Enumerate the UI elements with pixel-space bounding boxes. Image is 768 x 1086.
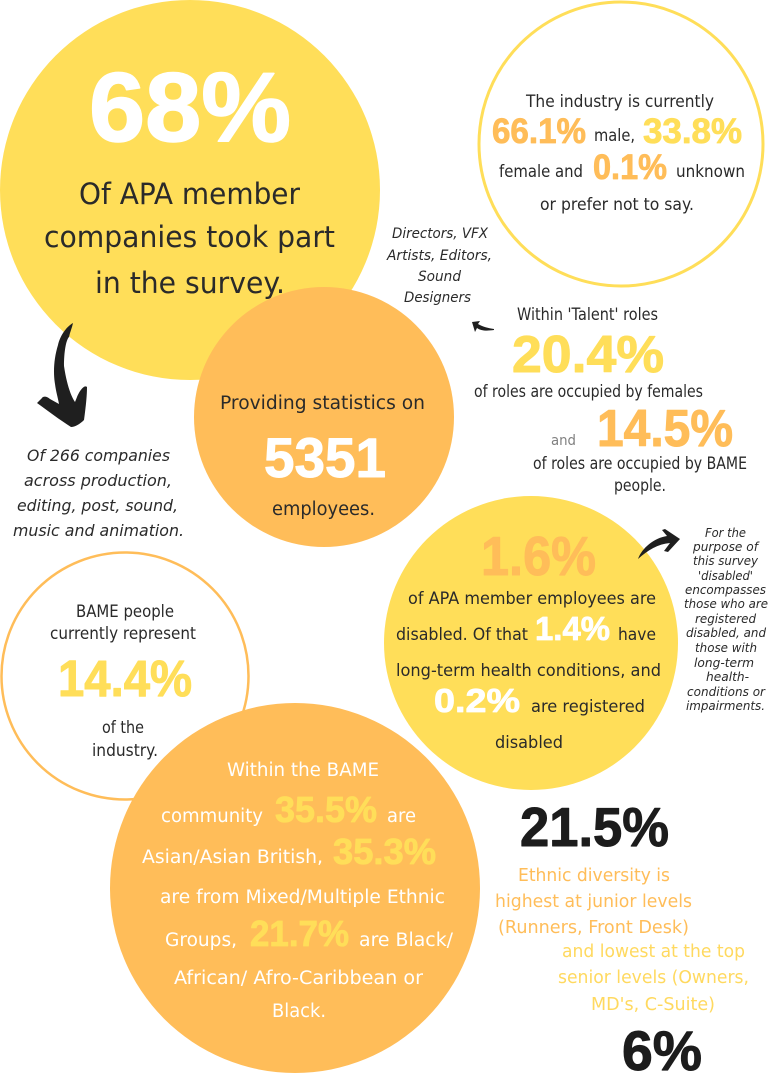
icon: curved arrow to disability note bbox=[638, 529, 680, 559]
panel: BAME community breakdown: 35.3% bbox=[333, 831, 436, 872]
panel: disability stats: long-term health conditions, and bbox=[396, 661, 661, 680]
panel: BAME community breakdown: Groups, bbox=[165, 930, 237, 951]
note: definition of disabled: 'disabled' bbox=[698, 568, 753, 583]
panel: BAME community breakdown: Black. bbox=[272, 1001, 326, 1022]
panel: BAME representation: 14.4% bbox=[58, 650, 192, 707]
panel: BAME representation bbox=[2, 552, 248, 800]
note: definition of disabled: impairments. bbox=[686, 698, 765, 713]
block: talent roles stats: Within 'Talent' roles bbox=[517, 305, 658, 324]
big stat: 5351: 5351 bbox=[264, 426, 386, 489]
text: providing statistics: Providing statistics on bbox=[220, 393, 425, 414]
panel: 68% survey participation bbox=[0, 0, 380, 380]
panel: disability stats: of APA member employees are bbox=[408, 589, 656, 608]
panel: BAME community breakdown: 21.7% bbox=[250, 913, 349, 954]
panel: BAME community breakdown: Asian/Asian British, bbox=[142, 847, 323, 868]
panel: BAME community breakdown: African/ Afro-Caribbean or bbox=[174, 968, 423, 989]
block: ethnic diversity by seniority: 21.5% bbox=[520, 796, 669, 858]
panel: industry gender split bbox=[479, 2, 763, 286]
block: ethnic diversity by seniority: highest at junior levels bbox=[495, 892, 692, 912]
note: 266 companies: Of 266 companies bbox=[27, 446, 170, 465]
block: ethnic diversity by seniority: and lowest at the top bbox=[562, 942, 745, 962]
note: definition of disabled: long-term bbox=[694, 655, 754, 670]
survey description: in the survey. bbox=[95, 266, 285, 300]
note: talent roles list: Sound bbox=[418, 269, 462, 285]
note: definition of disabled: those with bbox=[695, 640, 757, 655]
note: talent roles list bbox=[386, 226, 492, 306]
panel: BAME community breakdown: 35.5% bbox=[275, 789, 377, 830]
panel: BAME community breakdown: Within the BAME bbox=[227, 760, 379, 781]
note: definition of disabled: encompasses bbox=[685, 582, 766, 597]
note: definition of disabled: this survey bbox=[693, 553, 759, 568]
panel: disability stats: are registered bbox=[531, 697, 645, 716]
note: 266 companies: across production, bbox=[24, 471, 172, 490]
panel: industry gender split: 66.1% bbox=[492, 112, 586, 151]
block: talent roles stats: 14.5% bbox=[597, 400, 733, 458]
note: definition of disabled: registered bbox=[695, 611, 756, 626]
panel: BAME community breakdown: community bbox=[161, 806, 263, 827]
note: 266 companies: music and animation. bbox=[13, 521, 184, 540]
icon: large hand-drawn down arrow bbox=[37, 323, 87, 427]
panel: disability stats: 1.6% bbox=[481, 525, 596, 587]
block: ethnic diversity by seniority: (Runners, Front Desk) bbox=[498, 918, 689, 938]
note: definition of disabled: purpose of bbox=[692, 539, 760, 554]
note: definition of disabled: For the bbox=[705, 525, 746, 540]
block: ethnic diversity by seniority: Ethnic diversity is bbox=[518, 866, 670, 886]
panel: industry gender split: 0.1% bbox=[593, 148, 667, 187]
block: talent roles stats: and bbox=[551, 433, 576, 449]
panel: BAME community breakdown: are from Mixed/Multiple Ethnic bbox=[160, 887, 445, 908]
panel: disability stats: disabled bbox=[495, 733, 563, 752]
block: talent roles stats: people. bbox=[614, 476, 666, 495]
panel: BAME representation: currently represent bbox=[50, 624, 196, 643]
note: talent roles list: Artists, Editors, bbox=[386, 248, 492, 264]
panel: industry gender split: unknown bbox=[676, 162, 745, 181]
block: ethnic diversity by seniority: senior levels (Owners, bbox=[558, 968, 749, 988]
panel: industry gender split: female and bbox=[499, 162, 583, 181]
note: definition of disabled bbox=[684, 525, 768, 713]
block: talent roles stats: of roles are occupied by females bbox=[474, 382, 703, 401]
panel: BAME community breakdown: are bbox=[387, 806, 416, 827]
panel: BAME community breakdown bbox=[110, 703, 480, 1073]
block: ethnic diversity by seniority bbox=[495, 796, 749, 1082]
panel: 5351 employees bbox=[194, 287, 454, 547]
block: ethnic diversity by seniority: 6% bbox=[622, 1019, 702, 1082]
panel: BAME representation: industry. bbox=[92, 741, 158, 760]
icon: small curved arrow to talent note bbox=[472, 321, 494, 332]
note: 266 companies bbox=[13, 446, 184, 540]
panel: BAME representation: BAME people bbox=[76, 602, 174, 621]
note: talent roles list: Directors, VFX bbox=[392, 226, 489, 242]
survey description bbox=[44, 177, 335, 300]
panel: industry gender split: male, bbox=[594, 126, 635, 145]
block: talent roles stats: 20.4% bbox=[512, 326, 664, 384]
block: ethnic diversity by seniority: MD's, C-Suite) bbox=[591, 995, 715, 1015]
note: definition of disabled: health- bbox=[706, 669, 749, 684]
panel: BAME representation: of the bbox=[102, 718, 144, 737]
panel: industry gender split: or prefer not to say. bbox=[540, 195, 694, 214]
panel: disability stats: 0.2% bbox=[434, 682, 520, 719]
survey description: Of APA member bbox=[79, 177, 300, 211]
block: talent roles stats bbox=[474, 305, 747, 495]
panel: BAME community breakdown: are Black/ bbox=[359, 930, 454, 951]
big stat: 68%: 68% bbox=[89, 52, 291, 162]
panel: disability stats: have bbox=[618, 625, 656, 644]
panel: disability stats: 1.4% bbox=[535, 610, 610, 647]
text: employees: employees. bbox=[272, 499, 375, 520]
panel: disability stats bbox=[384, 496, 678, 790]
note: definition of disabled: conditions or bbox=[687, 684, 766, 699]
note: definition of disabled: disabled, and bbox=[686, 625, 766, 640]
survey description: companies took part bbox=[44, 220, 335, 254]
panel: industry gender split: 33.8% bbox=[643, 112, 742, 151]
note: talent roles list: Designers bbox=[404, 290, 471, 306]
note: 266 companies: editing, post, sound, bbox=[17, 496, 178, 515]
panel: industry gender split: The industry is currently bbox=[525, 92, 714, 111]
panel: disability stats: disabled. Of that bbox=[396, 625, 528, 644]
